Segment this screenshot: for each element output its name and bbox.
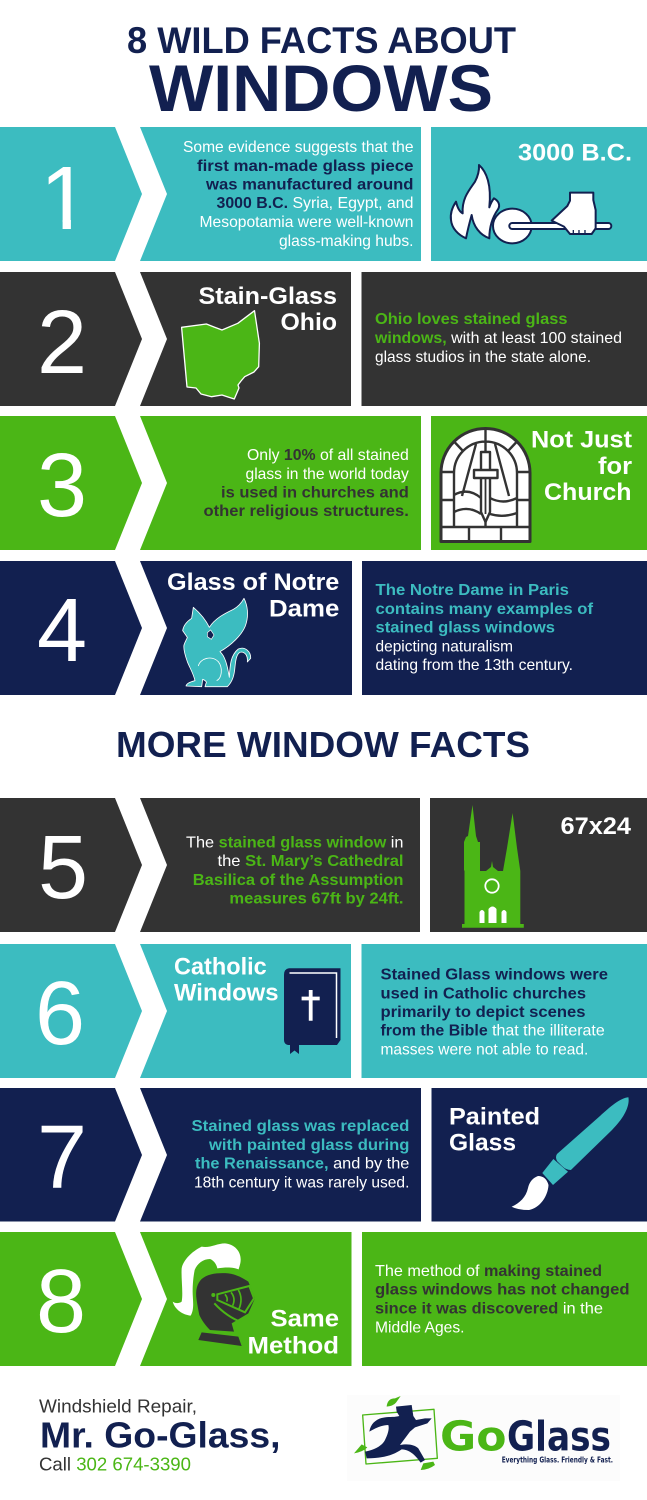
fact 5 text: measures 67ft by 24ft.	[229, 891, 404, 908]
fact 1 text: was manufactured around	[205, 176, 414, 194]
title: WINDOWS	[149, 51, 493, 125]
fact 8 text	[362, 1232, 647, 1366]
fact 3 side panel: Church	[544, 479, 632, 506]
fact 6 text: from the Bible that the illiterate	[380, 1023, 605, 1040]
number 2: 2	[37, 293, 87, 393]
number 1	[0, 127, 142, 261]
logo: GoGlass	[347, 1395, 620, 1481]
fact 1 text: 3000 B.C. Syria, Egypt, and	[216, 195, 414, 212]
footer: contact text: Windshield Repair,	[39, 1395, 197, 1416]
fact 7 side panel	[432, 1088, 647, 1222]
heading: more window facts: MORE WINDOW FACTS	[116, 724, 530, 765]
fact 2 text: windows, with at least 100 stained	[374, 330, 622, 347]
fact 8 heading panel: Method	[248, 1332, 339, 1359]
number 5: 5	[38, 818, 88, 918]
fact 5 side panel	[430, 798, 647, 932]
fact 5 text	[140, 798, 420, 932]
panel: fact 3	[0, 416, 647, 550]
fact 6 text	[362, 944, 647, 1078]
fact 6 heading panel	[140, 944, 351, 1078]
fact 7 text: with painted glass during	[208, 1137, 409, 1154]
fact 6 heading panel: Windows	[174, 980, 278, 1007]
number 7: 7	[37, 1108, 87, 1208]
fact 4 heading panel	[140, 561, 352, 695]
fact 7 side panel: Painted	[449, 1103, 540, 1130]
fact 3 text: Only 10% of all stained	[247, 447, 409, 464]
fact 2 heading panel: Stain-Glass	[198, 283, 337, 310]
fact 6 text: primarily to depict scenes	[380, 1004, 586, 1021]
panel: fact 4	[0, 561, 647, 695]
fact 3 text: is used in churches and	[221, 485, 409, 502]
footer: contact text: Call 302 674-3390	[39, 1454, 191, 1475]
fact 8 heading panel	[140, 1232, 352, 1366]
fact 8 text: since it was discovered in the	[375, 1300, 603, 1317]
icon: paint brush	[512, 1097, 629, 1210]
fact 2 heading panel	[140, 272, 351, 406]
fact 3 text: glass in the world today	[246, 466, 409, 483]
number 8: 8	[36, 1252, 86, 1352]
fact 6 text: Stained Glass windows were	[380, 966, 608, 983]
fact 6 text: masses were not able to read.	[380, 1042, 588, 1059]
fact 4 heading panel: Dame	[269, 596, 339, 623]
fact 3 side panel: for	[598, 453, 632, 480]
number 5	[0, 798, 142, 932]
fact 5 text: The stained glass window in	[186, 835, 404, 852]
icon: griffin	[183, 598, 251, 687]
fact 5 side panel: 67x24	[560, 813, 631, 840]
number 3: 3	[37, 436, 87, 536]
panel: fact 7	[0, 1088, 647, 1222]
number 8	[0, 1232, 142, 1366]
fact 8 text: glass windows has not changed	[375, 1282, 630, 1299]
fact 4 text: contains many examples of	[376, 601, 594, 618]
fact 3 text: other religious structures.	[204, 503, 409, 520]
icon: stained glass window with sword	[441, 428, 530, 542]
fact 5 text: the St. Mary’s Cathedral	[218, 853, 404, 870]
footer: contact text	[39, 1395, 280, 1475]
panel: fact 6	[0, 944, 647, 1078]
panel: fact 8	[0, 1232, 647, 1366]
title: 8 WILD FACTS ABOUT	[127, 20, 516, 61]
fact 4 text: stained glass windows	[376, 620, 555, 637]
panel: fact 2	[0, 272, 647, 406]
fact 6 heading panel: Catholic	[174, 953, 267, 980]
fact 3 text	[140, 416, 421, 550]
number 7	[0, 1088, 142, 1222]
fact 7 side panel: Glass	[449, 1130, 516, 1157]
fact 1 text: Some evidence suggests that the	[183, 139, 414, 156]
number 6	[0, 944, 142, 1078]
fact 1 text: glass-making hubs.	[279, 233, 414, 250]
number 3	[0, 416, 142, 550]
fact 1 text: Mesopotamia were well-known	[200, 214, 414, 231]
fact 1 side panel: 3000 B.C.	[518, 140, 632, 166]
fact 8 text: The method of making stained	[375, 1263, 602, 1280]
logo: GoGlass: Go	[440, 1413, 506, 1461]
fact 8 heading panel: Same	[270, 1306, 339, 1333]
fact 4 text: depicting naturalism	[376, 639, 513, 656]
number 2	[0, 272, 142, 406]
panel: fact 1	[0, 127, 647, 261]
panel: fact 5	[0, 798, 647, 932]
fact 7 text	[140, 1088, 421, 1222]
title	[127, 20, 516, 125]
fact 8 text: Middle Ages.	[375, 1319, 464, 1336]
fact 7 text: the Renaissance, and by the	[195, 1156, 410, 1173]
fact 5 text: Basilica of the Assumption	[193, 872, 404, 889]
icon: knight helmet	[173, 1243, 255, 1346]
fact 3 side panel	[431, 416, 647, 550]
fact 7 text: 18th century it was rarely used.	[194, 1175, 409, 1192]
fact 4 heading panel: Glass of Notre	[167, 569, 339, 596]
icon: Ohio state map	[182, 311, 259, 399]
fact 4 text: The Notre Dame in Paris	[376, 582, 569, 599]
number 4	[0, 561, 142, 695]
icon: running man in window frame	[354, 1396, 437, 1470]
number 6: 6	[35, 964, 85, 1064]
icon: cathedral	[462, 805, 524, 928]
fact 1 side panel	[431, 127, 647, 261]
fact 2 text	[362, 272, 647, 406]
fact 2 heading panel: Ohio	[280, 309, 337, 336]
fact 1 text	[140, 127, 421, 261]
fact 2 text: Ohio loves stained glass	[375, 311, 568, 328]
icon: flame and glass blowing pipe	[451, 165, 611, 243]
number 1: 1	[40, 149, 90, 249]
footer: contact text: Mr. Go-Glass,	[40, 1415, 280, 1456]
fact 2 text: glass studios in the state alone.	[375, 349, 591, 366]
fact 3 side panel: Not Just	[531, 427, 632, 454]
icon: bible	[284, 968, 340, 1054]
fact 6 text: used in Catholic churches	[380, 985, 586, 1002]
number 4: 4	[37, 581, 87, 681]
fact 1 text: first man-made glass piece	[197, 158, 414, 175]
fact 4 text: dating from the 13th century.	[376, 657, 573, 674]
fact 7 text: Stained glass was replaced	[192, 1118, 409, 1135]
fact 4 text	[362, 561, 647, 695]
logo: GoGlass: Glass	[507, 1413, 611, 1461]
